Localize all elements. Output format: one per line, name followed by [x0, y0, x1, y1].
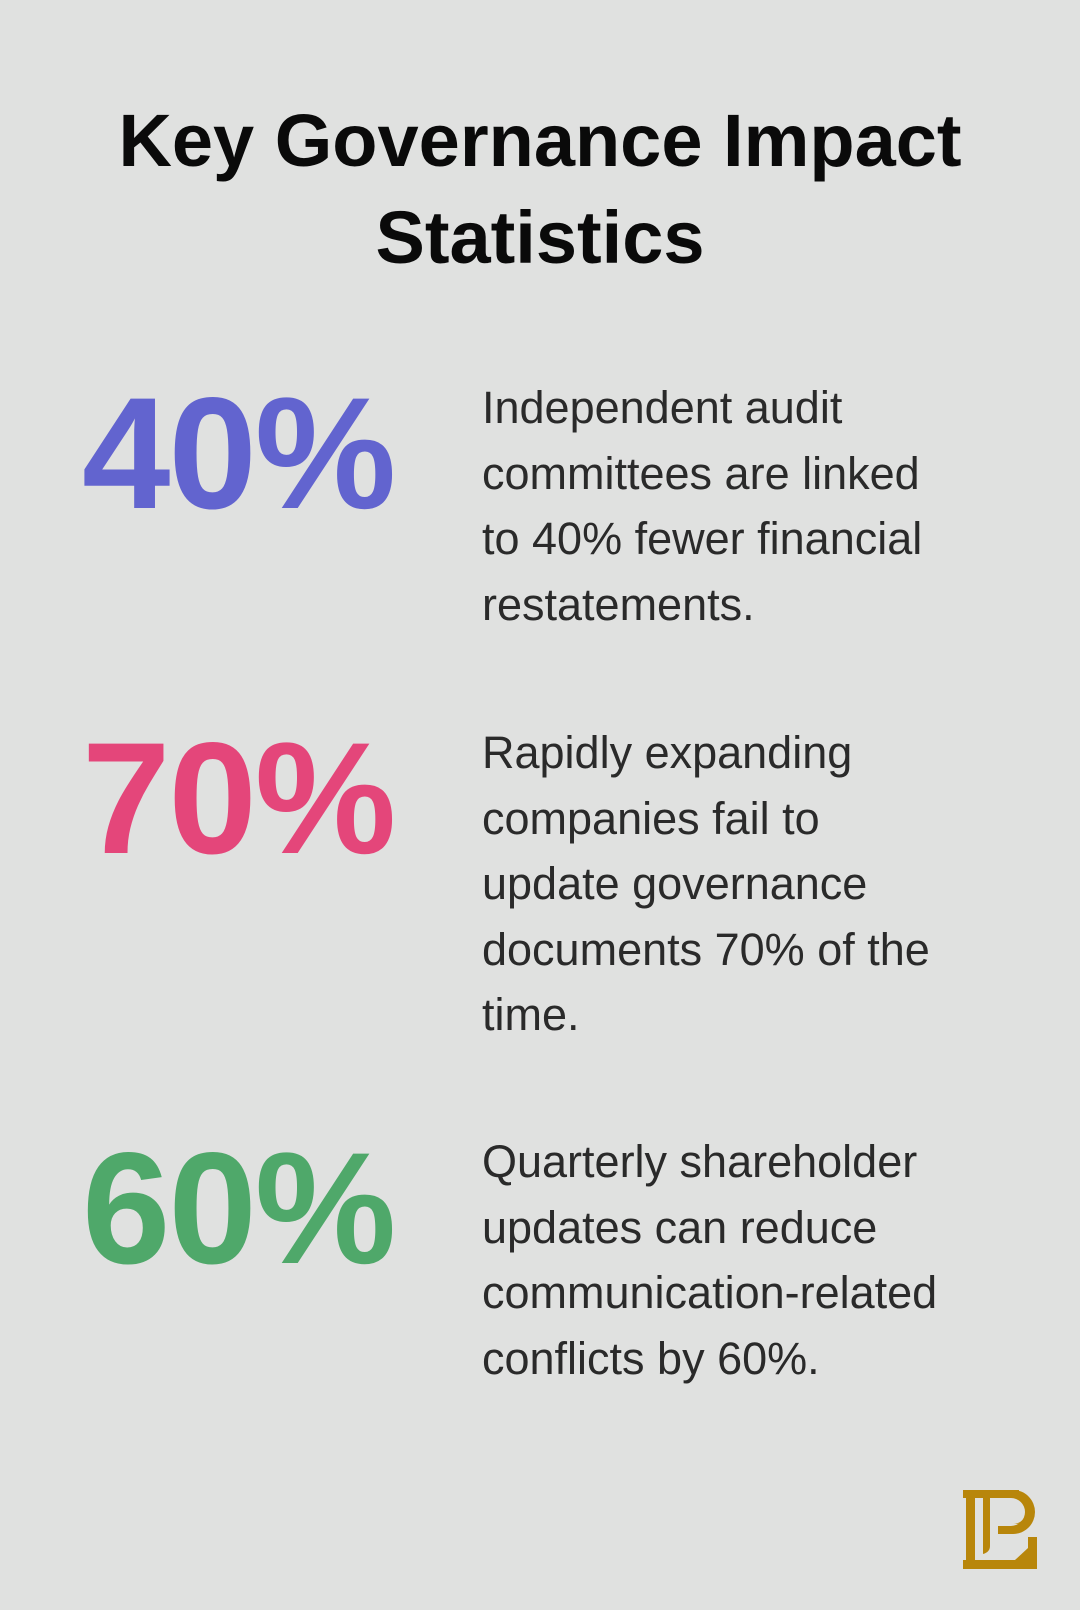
- number: 70%: 70%: [82, 709, 394, 887]
- title: Key Governance Impact: [118, 99, 962, 182]
- description 3: Quarterly shareholder updates can reduce communication-related conflicts by 60%.: [482, 1136, 937, 1384]
- description 1: Independent audit committees are linked to 40% fewer financial restatements.: [482, 382, 922, 630]
- number: 60%: 60%: [82, 1119, 394, 1297]
- title: [118, 99, 962, 279]
- logo: [963, 1490, 1037, 1569]
- number: 40%: 40%: [82, 364, 394, 542]
- stat 3: [82, 1119, 937, 1384]
- stat 2: [82, 709, 930, 1040]
- title: Statistics: [375, 196, 705, 279]
- description 2: Rapidly expanding companies fail to update governance documents 70% of the time.: [482, 727, 930, 1040]
- stat 1: [82, 364, 922, 630]
